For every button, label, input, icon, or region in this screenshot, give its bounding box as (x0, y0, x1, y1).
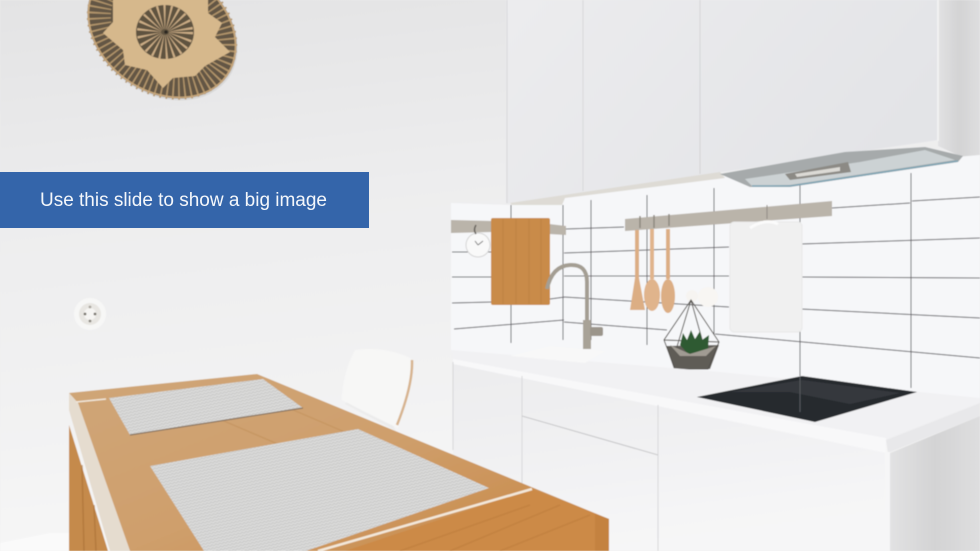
upper cabinets (506, 0, 980, 204)
right rail with hooks (625, 201, 832, 231)
dining table (69, 374, 609, 551)
terrarium with plant (664, 287, 719, 369)
wall clock (466, 225, 490, 257)
wall socket (74, 298, 106, 330)
floor (0, 533, 72, 551)
banner (0, 172, 369, 228)
sink basin (510, 346, 606, 363)
range hood (720, 147, 963, 187)
small placemat (109, 379, 303, 435)
wooden cutting board (491, 218, 550, 305)
left rail (451, 220, 566, 235)
induction cooktop (697, 376, 917, 422)
banner text: Use this slide to show a big image (40, 190, 327, 211)
wooden spatula (661, 229, 675, 313)
wooden spoon (644, 229, 660, 311)
white hanging board (730, 222, 802, 332)
under-cabinet ledge (510, 172, 725, 205)
tiled backsplash (451, 155, 980, 402)
wooden fork (630, 230, 645, 310)
white chair (342, 349, 412, 431)
faucet (547, 265, 603, 349)
lower cabinets (453, 362, 980, 551)
wall basket (86, 0, 238, 100)
counter top (451, 350, 980, 453)
large placemat (150, 429, 489, 551)
